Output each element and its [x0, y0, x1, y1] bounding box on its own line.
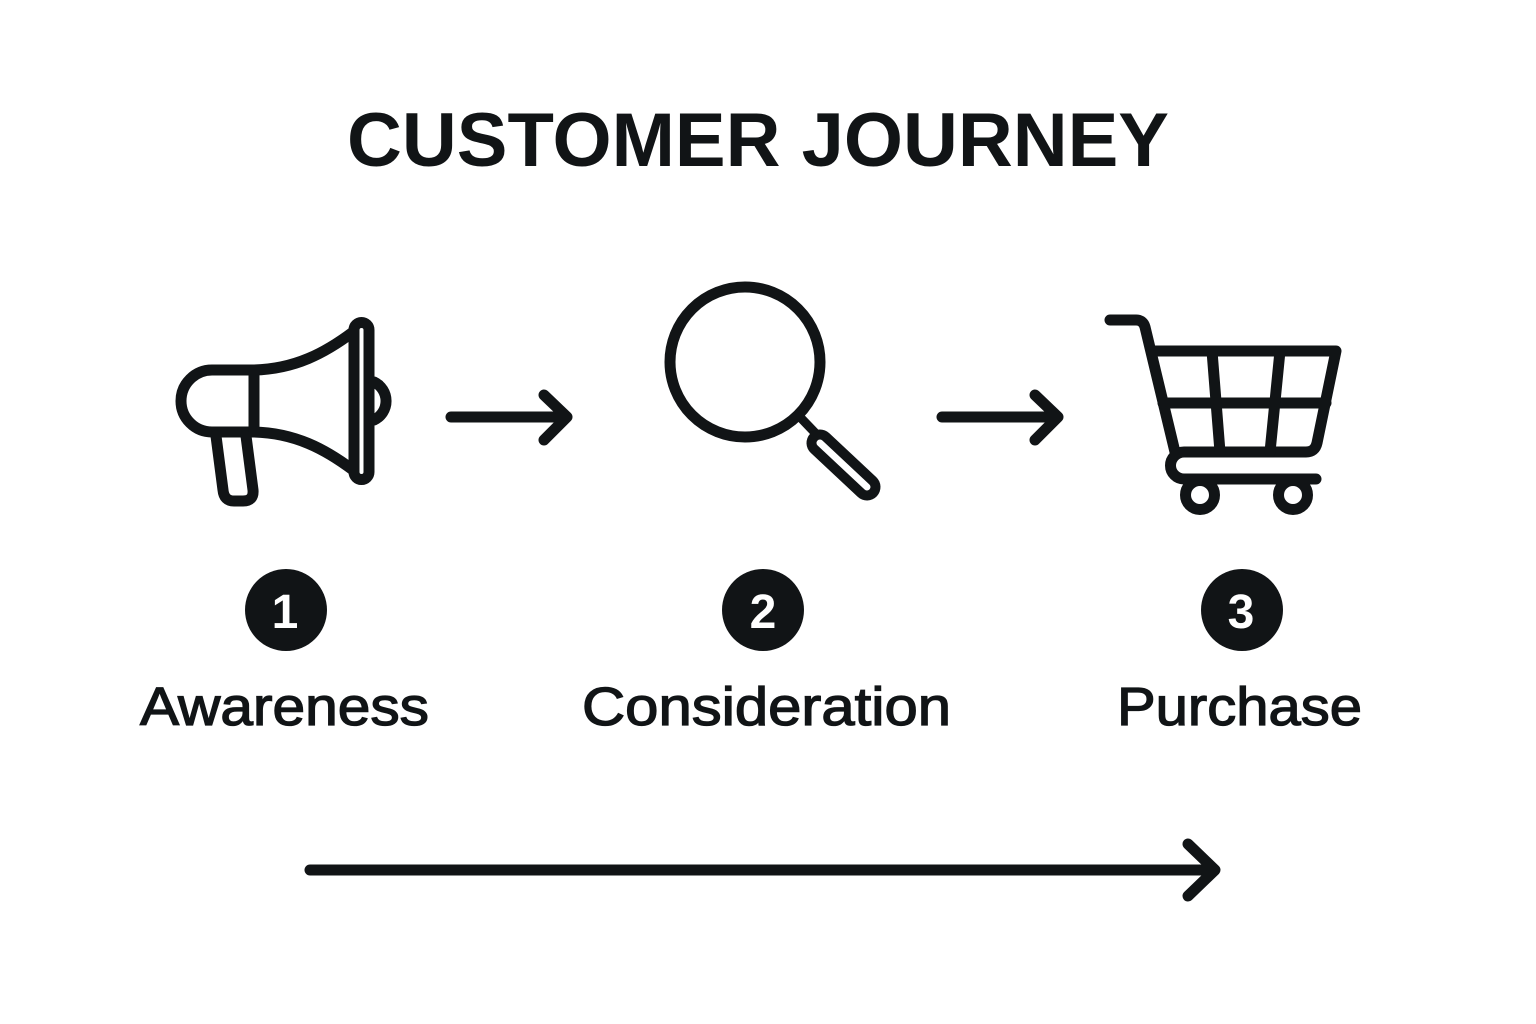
step 1: awareness: 1	[272, 586, 298, 639]
step 3: purchase: Purchase	[1117, 677, 1362, 737]
step 2: consideration: 2	[750, 586, 776, 639]
step 3: purchase: 3	[1228, 586, 1254, 639]
step 1: awareness	[140, 569, 429, 737]
arrow: consideration to purchase	[942, 395, 1058, 440]
step 3: purchase	[1117, 569, 1362, 737]
step 1: awareness: Awareness	[140, 677, 429, 737]
step 2: consideration	[582, 569, 951, 737]
icon: shopping cart	[1110, 320, 1336, 510]
arrow: awareness to consideration	[451, 395, 567, 440]
arrow: overall journey direction	[310, 844, 1215, 896]
icon: megaphone	[181, 322, 386, 501]
step 2: consideration: Consideration	[582, 677, 951, 737]
title: CUSTOMER JOURNEY	[347, 98, 1169, 183]
icon: magnifying glass	[670, 287, 867, 487]
